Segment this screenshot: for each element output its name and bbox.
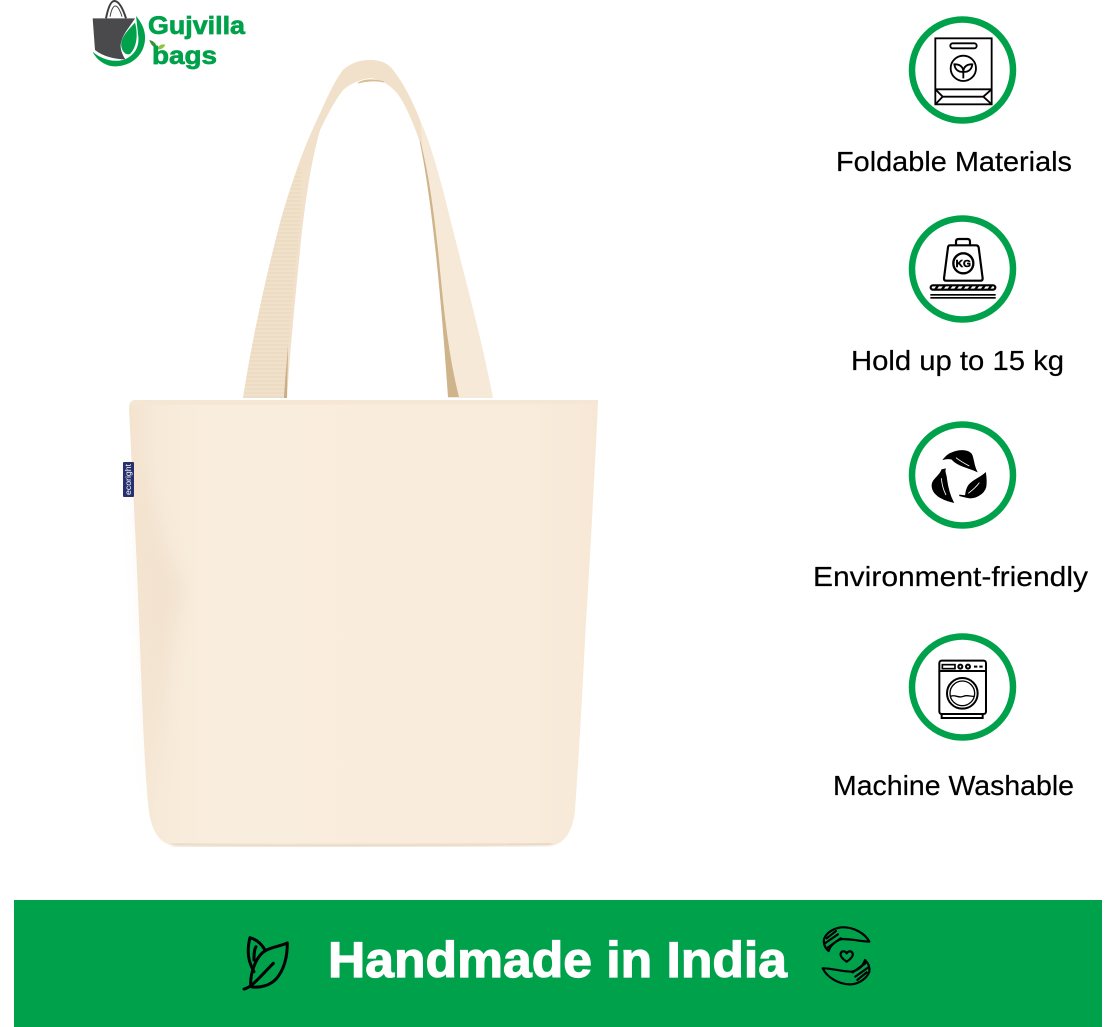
feature: Foldable Materials bbox=[836, 20, 1072, 177]
bag body bbox=[129, 400, 598, 846]
feature: Machine Washable bbox=[833, 636, 1074, 801]
blue side tag bbox=[123, 462, 134, 497]
icon: washing machine bbox=[939, 661, 986, 718]
green ring bbox=[912, 636, 1013, 738]
icon: leaves bbox=[244, 938, 287, 989]
logo icon: bag and leaf bbox=[93, 1, 165, 66]
feature: Environment-friendly bbox=[813, 424, 1088, 592]
green ring bbox=[912, 424, 1013, 526]
green banner background bbox=[14, 900, 1102, 1027]
tote bag product image bbox=[123, 60, 598, 846]
logo wordmark line 1: Gujvilla bbox=[148, 12, 246, 40]
blue side tag: ecoright bbox=[124, 463, 133, 495]
label: Foldable Materials bbox=[836, 146, 1072, 177]
icon: foldable bag bbox=[935, 38, 992, 104]
logo wordmark line 2: bags bbox=[152, 42, 217, 70]
label: Hold up to 15 kg bbox=[851, 345, 1064, 376]
bag top hem bbox=[129, 400, 598, 408]
label: Environment-friendly bbox=[813, 561, 1088, 592]
bag handles bbox=[243, 60, 493, 398]
icon: kg weight bbox=[930, 239, 996, 299]
banner: Handmade in India bbox=[14, 900, 1102, 1027]
label: Machine Washable bbox=[833, 770, 1074, 801]
green ring bbox=[912, 20, 1013, 120]
logo: Gujvilla bags bbox=[93, 1, 246, 70]
headline: Handmade in India bbox=[328, 932, 788, 988]
icon: recycling leaves bbox=[932, 451, 986, 502]
bag side fold shading bbox=[138, 450, 185, 800]
icon: caring hands with heart bbox=[823, 927, 869, 984]
green ring bbox=[912, 218, 1013, 320]
icon: kg weight: KG bbox=[956, 259, 971, 270]
feature: Hold up to 15 kg bbox=[851, 218, 1064, 376]
bag bottom edge bbox=[172, 844, 552, 846]
